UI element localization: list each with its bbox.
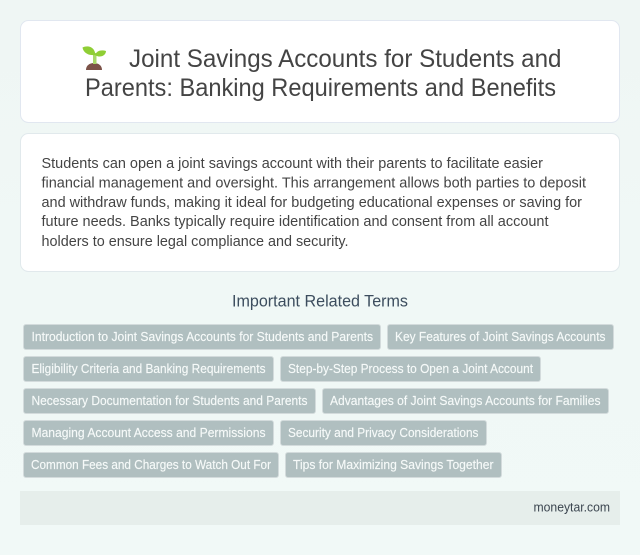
tag: introduction: [24, 324, 380, 350]
footer: moneytar.com: [534, 500, 610, 514]
tag: step-by-step: [280, 356, 540, 382]
tag: key features: Key Features of Joint Savings Accounts: [395, 329, 606, 344]
tag: tips: [286, 452, 502, 478]
text block: description: Students can open a joint savings account with their parents to facilitate easier: [42, 156, 543, 172]
tag: tips: Tips for Maximizing Savings Together: [293, 457, 494, 472]
panel: description: [20, 134, 620, 272]
icon: sprout: [82, 46, 106, 70]
tag: advantages: Advantages of Joint Savings Accounts for Families: [330, 393, 601, 408]
title: Parents: Banking Requirements and Benefits: [85, 74, 556, 102]
tag: documentation: Necessary Documentation for Students and Parents: [32, 393, 308, 408]
tag: key features: [388, 324, 614, 350]
tag: eligibility: [24, 356, 274, 382]
heading: important related terms: Important Related Terms: [232, 292, 408, 310]
text block: description: financial management and oversight. This arrangement allows both parties to deposit: [42, 176, 586, 192]
tag: introduction: Introduction to Joint Savings Accounts for Students and Parents: [32, 329, 373, 344]
text block: description: future needs. Banks typically require identification and consent from all account: [42, 214, 548, 230]
footer: [20, 491, 620, 525]
text block: description: [42, 156, 586, 250]
tag: advantages: [322, 388, 608, 414]
tag: security: [280, 420, 486, 446]
tag: documentation: [24, 388, 316, 414]
tag: account access: [24, 420, 274, 446]
tag: account access: Managing Account Access and Permissions: [32, 425, 266, 440]
tag: step-by-step: Step-by-Step Process to Open a Joint Account: [288, 361, 533, 376]
tag: fees: [24, 452, 278, 478]
text block: description: holders to ensure legal compliance and security.: [42, 234, 348, 250]
title: [85, 45, 562, 102]
title: Joint Savings Accounts for Students and: [129, 45, 562, 73]
panel: title header: [20, 20, 620, 122]
tag: fees: Common Fees and Charges to Watch Out For: [31, 457, 272, 472]
tag: security: Security and Privacy Considerations: [288, 425, 479, 440]
tag: eligibility: Eligibility Criteria and Banking Requirements: [32, 361, 266, 376]
text block: description: and withdraw funds, making it ideal for budgeting educational expenses or saving for: [42, 195, 582, 211]
tag list: [24, 324, 614, 478]
